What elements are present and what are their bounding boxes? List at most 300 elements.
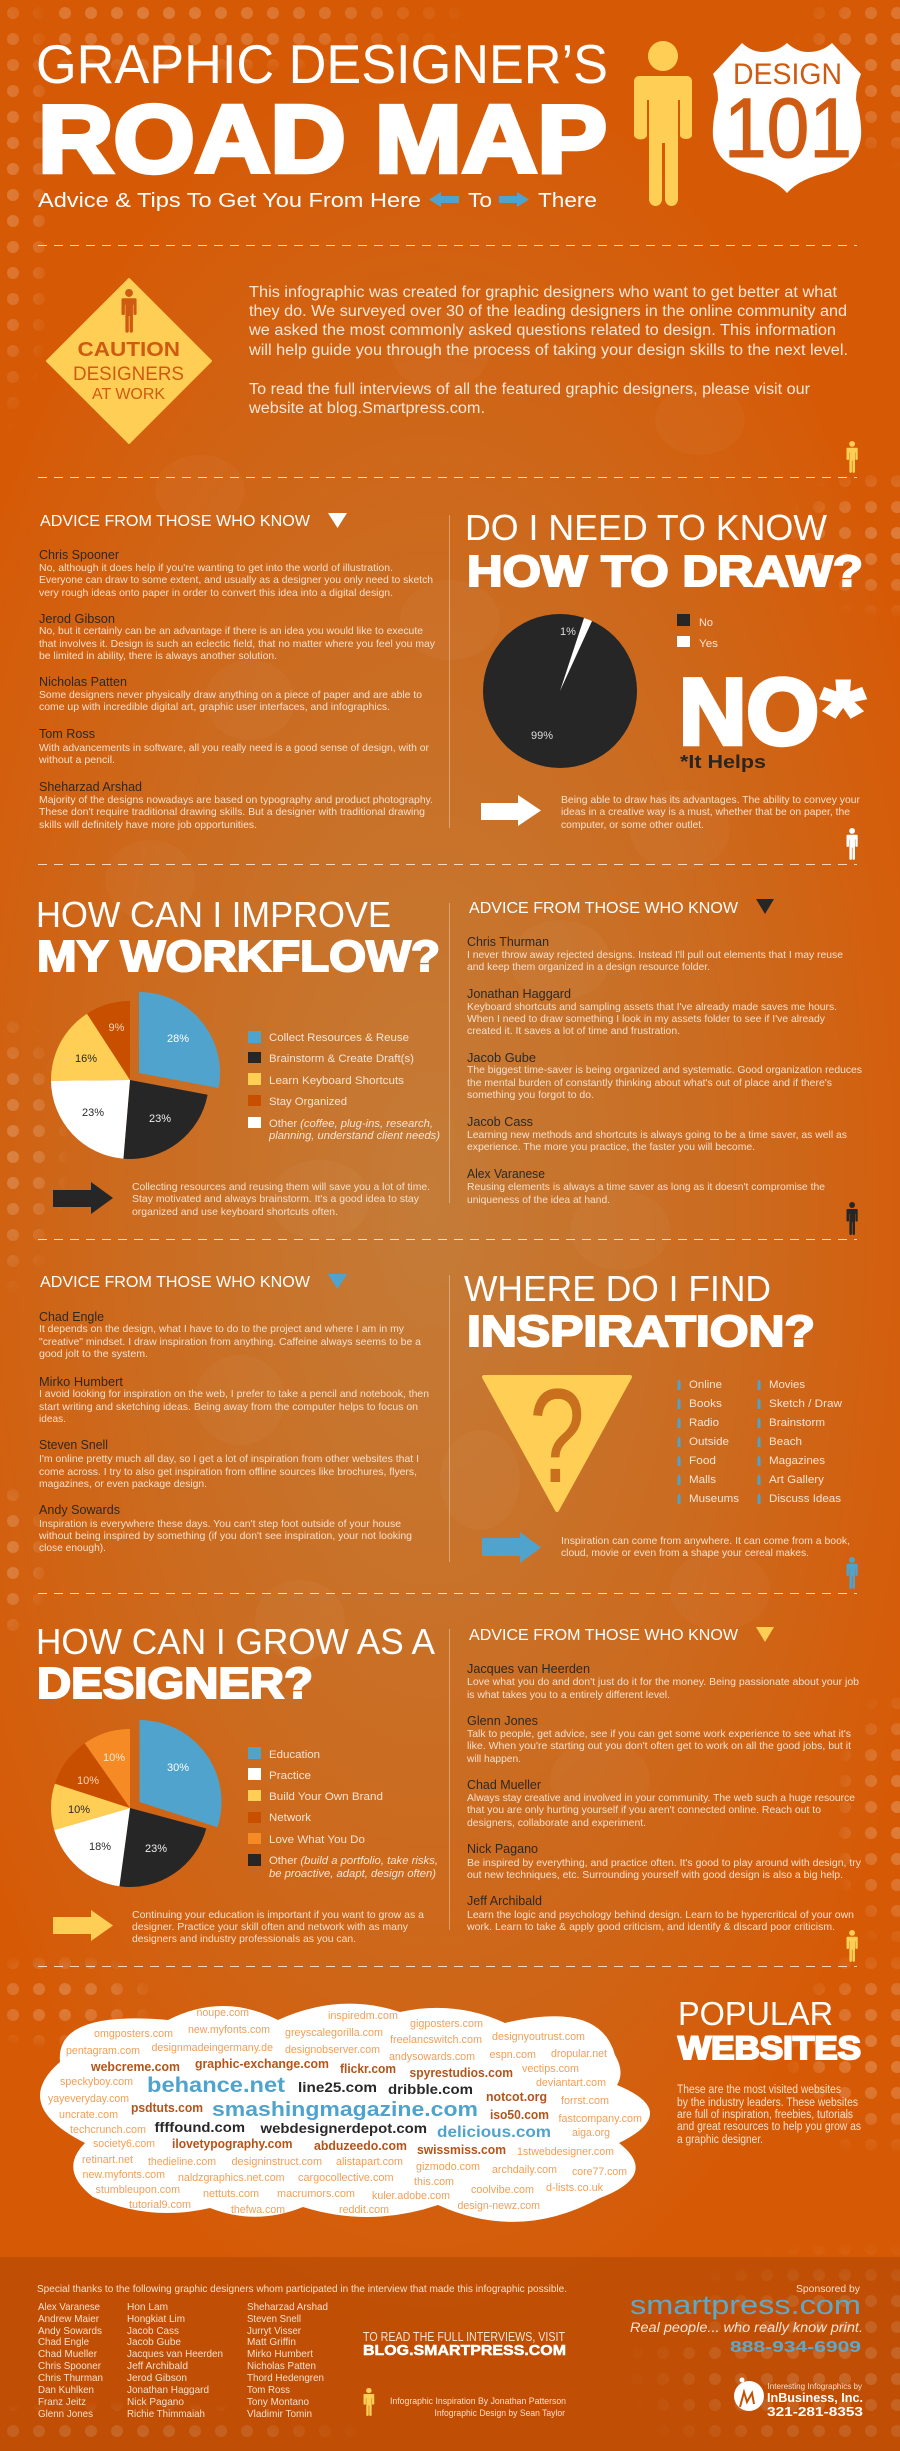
heading: workflow <box>36 894 440 981</box>
word cloud: websites: pentagram.com <box>66 2045 140 2057</box>
word cloud: websites: reddit.com <box>339 2204 389 2216</box>
names column 2: Jacob Cass <box>127 2325 179 2337</box>
icon: design 101 shield: DESIGN <box>733 58 842 91</box>
word cloud: websites: kuler.adobe.com <box>372 2190 450 2202</box>
advice: Steven Snell: I'm online pretty much all day, so I get a lot of inspiration from other websites that I <box>39 1454 419 1465</box>
advice: Steven Snell: come across. I try to also get inspiration from offline sources like brochures, flyers, <box>39 1467 417 1478</box>
word cloud: websites: new.myfonts.com <box>82 2169 165 2181</box>
footer: sponsor smartpress: Sponsored by <box>796 2283 861 2295</box>
footer: special thanks: Special thanks to the following graphic designers whom participated in the interview that made this infographic possible. <box>37 2283 567 2295</box>
advice: Jonathan Haggard: Jonathan Haggard <box>467 987 571 1001</box>
arrow and takeaway: grow <box>53 1910 424 1945</box>
advice: Tom Ross: Tom Ross <box>39 727 95 741</box>
heading: how to draw: DO I NEED TO KNOW <box>465 507 827 548</box>
legend: grow: Love What You Do <box>269 1834 365 1846</box>
pie chart: workflow <box>51 992 220 1159</box>
word cloud: websites: thedieline.com <box>148 2156 216 2168</box>
advice: Chris Spooner <box>39 548 433 599</box>
word cloud: websites: designmadeingermany.de <box>152 2042 273 2054</box>
intro text: To read the full interviews of all the featured graphic designers, please visit our <box>249 381 810 398</box>
list: inspiration sources: Magazines <box>769 1455 826 1467</box>
advice: Tom Ross <box>38 727 430 766</box>
footer: inbusiness logo <box>734 2378 863 2419</box>
advice: Nick Pagano: out new techniques, etc. Surrounding yourself with good design is also a big help. <box>467 1870 843 1881</box>
arrow and takeaway: inspiration: Inspiration can come from anywhere. It can come from a book, <box>561 1536 850 1547</box>
arrow and takeaway: workflow: organized and use keyboard shortcuts often. <box>132 1207 338 1218</box>
list: inspiration sources: Radio <box>689 1417 719 1429</box>
word cloud: websites: spyrestudios.com <box>410 2065 513 2080</box>
advice: Jonathan Haggard: created it. It saves a lot of time and frustration. <box>467 1026 680 1037</box>
pie chart: grow: 23% <box>145 1843 167 1855</box>
caution sign: AT WORK <box>92 386 165 403</box>
advice: Chris Thurman: Chris Thurman <box>467 935 549 949</box>
advice: Jacob Cass: experience. The more you practice, the faster you will become. <box>467 1142 755 1153</box>
subtitle with arrows: There <box>538 190 597 212</box>
list: inspiration sources: Brainstorm <box>769 1417 825 1429</box>
word cloud: websites: d-lists.co.uk <box>546 2182 603 2194</box>
arrow and takeaway: draw: Being able to draw has its advantages. The ability to convey your <box>561 795 861 806</box>
advice: Jacques van Heerden <box>467 1662 859 1701</box>
advice: Jacques van Heerden: Love what you do and don't just do it for the money. Being passionate about your job <box>467 1677 859 1688</box>
heading: workflow: MY WORKFLOW? <box>37 932 440 981</box>
word cloud: websites: retinart.net <box>82 2154 133 2166</box>
list: inspiration sources: Discuss Ideas <box>769 1493 842 1505</box>
word cloud: websites: design-newz.com <box>458 2200 540 2212</box>
pie chart: workflow: 23% <box>82 1107 104 1119</box>
word cloud: websites: speckyboy.com <box>60 2076 133 2088</box>
advice: Andy Sowards <box>38 1503 412 1554</box>
word cloud: websites: designinstruct.com <box>232 2156 322 2168</box>
subtitle with arrows <box>38 190 597 212</box>
names column 3: Tony Montano <box>247 2396 309 2408</box>
advice: Chad Engle: Chad Engle <box>39 1310 104 1324</box>
advice: Glenn Jones: Glenn Jones <box>467 1714 538 1728</box>
advice: Chris Spooner: very rough ideas onto paper in order to convert this idea into a digital design. <box>39 588 393 599</box>
word cloud: websites: webcreme.com <box>90 2059 180 2074</box>
arrow and takeaway: draw: computer, or some other outlet. <box>561 820 704 831</box>
names column 1: Chris Spooner <box>38 2360 101 2372</box>
title <box>36 33 608 193</box>
footer: credits with person icon: Infographic Design by Sean Taylor <box>434 2408 565 2419</box>
advice: Andy Sowards: Andy Sowards <box>39 1503 120 1517</box>
list: inspiration sources: Beach <box>769 1436 802 1448</box>
icon: question triangle: ? <box>529 1362 585 1511</box>
word cloud: websites: coolvibe.com <box>471 2184 534 2196</box>
pie chart: draw <box>483 614 637 768</box>
word cloud: websites: iso50.com <box>490 2107 549 2122</box>
icon: large person <box>634 41 692 206</box>
subtitle with arrows: To <box>468 190 492 212</box>
legend: grow: be proactive, adapt, design often) <box>269 1868 436 1880</box>
panel: popular websites: by the industry leaders. These websites <box>677 2097 858 2109</box>
big answer: no: *It Helps <box>680 752 766 772</box>
big answer: no: * <box>821 661 866 768</box>
heading: inspiration: INSPIRATION? <box>467 1307 815 1356</box>
names column 2: Jerod Gibson <box>127 2372 187 2384</box>
panel: advice on inspiration <box>38 1274 429 1554</box>
pie chart: workflow: 28% <box>167 1033 189 1045</box>
small person yellow <box>846 441 858 473</box>
legend: workflow: Brainstorm & Create Draft(s) <box>269 1053 414 1065</box>
title: ROAD MAP <box>38 86 607 193</box>
advice: Chris Thurman: and keep them organized in a design resource folder. <box>467 962 710 973</box>
legend: workflow: Collect Resources & Reuse <box>269 1032 409 1044</box>
word cloud: websites: yayeveryday.com <box>48 2093 129 2105</box>
panel: advice on workflow <box>467 899 862 1206</box>
advice: Jacob Cass: Jacob Cass <box>467 1115 533 1129</box>
advice: Chad Mueller: that you are only hurting yourself if you aren't connected online. Reach out to <box>467 1805 821 1816</box>
advice: Jeff Archibald: Jeff Archibald <box>467 1894 542 1908</box>
arrow and takeaway: inspiration <box>482 1532 850 1563</box>
advice: Nicholas Patten: Nicholas Patten <box>39 675 127 689</box>
names column 1: Glenn Jones <box>38 2408 93 2420</box>
names column 1: Andy Sowards <box>38 2325 102 2337</box>
word cloud: websites: designobserver.com <box>285 2044 380 2056</box>
panel: popular websites: POPULAR <box>678 1995 833 2032</box>
heading: grow: HOW CAN I GROW AS A <box>36 1621 435 1662</box>
advice: Glenn Jones: will happen. <box>466 1754 521 1765</box>
legend: grow: Other (build a portfolio, take risks, <box>269 1855 438 1867</box>
advice: Chris Spooner: Everyone can draw to some extent, and usually as a designer you only need to sketch <box>39 575 433 586</box>
advice: Jonathan Haggard: Keyboard shortcuts and sampling assets that I've already made saves me hours. <box>467 1002 837 1013</box>
intro text: website at blog.Smartpress.com. <box>248 400 485 417</box>
pie chart: grow: 30% <box>167 1762 189 1774</box>
advice: Sheharzad Arshad <box>39 780 433 831</box>
names column 2: Hongkiat Lim <box>127 2313 185 2325</box>
word cloud: websites: omgposters.com <box>94 2028 173 2040</box>
word cloud: websites: core77.com <box>572 2166 627 2178</box>
names column 3: Steven Snell <box>247 2313 301 2325</box>
advice: Andy Sowards: Inspiration is everywhere these days. You can't step foot outside of your house <box>39 1519 401 1530</box>
caution sign <box>47 279 211 443</box>
list: inspiration sources: Online <box>689 1379 722 1391</box>
advice: Jacob Gube: Jacob Gube <box>467 1051 536 1065</box>
pie chart: draw: 99% <box>531 730 553 742</box>
word cloud: websites: this.com <box>414 2176 454 2188</box>
word cloud: websites <box>40 2004 650 2222</box>
legend: grow: Practice <box>269 1770 311 1782</box>
word cloud: websites: gigposters.com <box>410 2018 483 2030</box>
footer: sponsor smartpress: 888-934-6909 <box>730 2339 862 2356</box>
advice: Andy Sowards: close enough). <box>39 1543 106 1554</box>
names column 3: Vladimir Tomin <box>247 2408 312 2420</box>
names column 2: Jonathan Haggard <box>127 2384 209 2396</box>
pie chart: grow: 10% <box>68 1804 90 1816</box>
footer: sponsor smartpress <box>630 2283 863 2356</box>
footer: sponsor smartpress: Real people... who really know print. <box>630 2320 863 2335</box>
advice: Mirko Humbert <box>39 1375 429 1425</box>
advice: Steven Snell: magazines, or even package design. <box>39 1479 207 1490</box>
word cloud: websites: delicious.com <box>437 2124 551 2141</box>
legend: workflow <box>248 1031 440 1142</box>
pie chart: draw: 1% <box>560 626 576 638</box>
names column 1: Chris Thurman <box>38 2372 103 2384</box>
advice: Alex Varanese <box>467 1167 825 1206</box>
arrow and takeaway: draw: ideas in a creative way is a must, whether that be on paper, the <box>561 807 850 818</box>
word cloud: websites: graphic-exchange.com <box>195 2056 329 2071</box>
word cloud: websites: espn.com <box>490 2049 536 2061</box>
pie chart: workflow: 23% <box>149 1113 171 1125</box>
footer: read more link: TO READ THE FULL INTERVIEWS, VISIT <box>363 2329 565 2344</box>
word cloud: websites: forrst.com <box>561 2095 609 2107</box>
small person dark <box>846 1202 858 1235</box>
advice: Chad Mueller: designers, collaborate and experiment. <box>467 1818 646 1829</box>
subtitle with arrows: Advice & Tips To Get You From Here <box>38 190 421 212</box>
legend: draw: Yes <box>699 638 719 650</box>
legend: workflow: planning, understand client needs) <box>268 1130 440 1142</box>
icon: design 101 shield: 101 <box>724 81 852 175</box>
advice: Tom Ross: without a pencil. <box>38 755 115 766</box>
footer: sponsor smartpress: smartpress.com <box>630 2290 861 2320</box>
advice: Nicholas Patten: Some designers never physically draw anything on a piece of paper and are able to <box>39 690 422 701</box>
advice: Chris Spooner: No, although it does help if you're wanting to get into the world of illustration. <box>39 563 393 574</box>
word cloud: websites: thefwa.com <box>231 2204 285 2216</box>
names column 1: Chad Engle <box>38 2336 89 2348</box>
advice: Chad Mueller: Always stay creative and involved in your community. The web such a huge resource <box>467 1793 855 1804</box>
title: GRAPHIC DESIGNER’S <box>36 33 608 95</box>
advice: Jeff Archibald <box>466 1894 854 1933</box>
advice: Jacques van Heerden: is what takes you to a entirely different level. <box>467 1690 670 1701</box>
advice: Sheharzad Arshad: These don't require traditional drawing skills. But a designer with traditional drawing <box>39 807 425 818</box>
names column 2: Richie Thimmaiah <box>127 2408 205 2420</box>
advice: Alex Varanese: uniqueness of the idea at hand. <box>467 1195 610 1206</box>
advice: Nicholas Patten <box>39 675 422 713</box>
names column 3: Jurryt Visser <box>247 2325 301 2337</box>
arrow and takeaway: workflow <box>53 1182 430 1218</box>
word cloud: websites: stumbleupon.com <box>96 2184 180 2196</box>
advice heading: ADVICE FROM THOSE WHO KNOW <box>469 900 739 917</box>
footer: inbusiness logo: 321-281-8353 <box>767 2404 863 2419</box>
panel: popular websites: These are the most visited websites <box>677 2084 841 2096</box>
list: inspiration sources: Malls <box>689 1474 717 1486</box>
intro text <box>248 284 848 417</box>
word cloud: websites: society6.com <box>93 2138 155 2150</box>
advice heading: ADVICE FROM THOSE WHO KNOW <box>40 513 311 530</box>
advice: Sheharzad Arshad: skills will definitely have more job opportunities. <box>39 820 257 831</box>
heading: inspiration <box>464 1268 815 1356</box>
advice: Jerod Gibson: No, but it certainly can be an advantage if there is an idea you would like to execute <box>39 626 423 637</box>
names column 3: Thord Hedengren <box>247 2372 324 2384</box>
heading: inspiration: WHERE DO I FIND <box>464 1268 771 1309</box>
panel: popular websites: are full of inspiration, freebies, tutorials <box>677 2109 853 2121</box>
word cloud: websites: notcot.org <box>486 2089 547 2104</box>
names column 3: Nicholas Patten <box>247 2360 316 2372</box>
advice: Jerod Gibson: be limited in ability, there is always another solution. <box>39 651 277 662</box>
word cloud: websites: alistapart.com <box>336 2156 403 2168</box>
footer: credits with person icon: Infographic Inspiration By Jonathan Patterson <box>390 2396 566 2407</box>
advice heading: ADVICE FROM THOSE WHO KNOW <box>469 1627 739 1644</box>
advice: Jacob Gube: the mental burden of constantly thinking about what's out of place and if there's <box>467 1078 832 1089</box>
footer: credits with person icon <box>364 2388 566 2419</box>
advice: Glenn Jones <box>466 1714 851 1765</box>
list: inspiration sources: Museums <box>689 1493 740 1505</box>
list: inspiration sources: Sketch / Draw <box>769 1398 842 1410</box>
advice: Chad Mueller <box>467 1778 855 1829</box>
icon: design 101 shield <box>713 43 861 193</box>
advice: Mirko Humbert: start writing and sketching ideas. Being away from the computer helps to focus on <box>39 1402 418 1413</box>
word cloud: websites: andysowards.com <box>389 2051 475 2063</box>
heading: workflow: HOW CAN I IMPROVE <box>36 894 391 935</box>
panel: advice on growing <box>466 1627 862 1933</box>
list: inspiration sources <box>678 1379 842 1505</box>
advice: Nicholas Patten: come up with incredible digital art, graphic user interfaces, and infographics. <box>39 702 390 713</box>
legend: draw <box>677 614 719 650</box>
word cloud: websites: behance.net <box>147 2074 285 2097</box>
word cloud: websites: tutorial9.com <box>129 2199 191 2211</box>
big answer: no: NO <box>679 659 819 764</box>
word cloud: websites: fastcompany.com <box>558 2113 642 2125</box>
list: inspiration sources: Books <box>689 1398 723 1410</box>
advice: Jacques van Heerden: Jacques van Heerden <box>467 1662 590 1676</box>
advice: Mirko Humbert: ideas. <box>39 1414 66 1425</box>
caution sign: DESIGNERS <box>73 364 184 385</box>
advice: Chris Thurman <box>467 935 843 973</box>
word cloud: websites: techcrunch.com <box>70 2124 146 2136</box>
names column 3: Tom Ross <box>247 2384 290 2396</box>
word cloud: websites: designyoutrust.com <box>492 2031 585 2043</box>
small person blue <box>846 1557 858 1589</box>
names column 2: Jacob Gube <box>127 2336 181 2348</box>
names column 2: Nick Pagano <box>127 2396 184 2408</box>
advice: Sheharzad Arshad: Majority of the designs nowadays are based on typography and product photography. <box>39 795 433 806</box>
intro text: they do. We surveyed over 30 of the leading designers in the online community and <box>249 303 847 320</box>
word cloud: websites: ffffound.com <box>154 2119 245 2135</box>
advice: Jerod Gibson: that involves it. Design is such an eclectic field, that no matter where you feel you may <box>39 639 436 650</box>
arrow and takeaway: grow: designers and industry professionals as you can. <box>132 1934 356 1945</box>
advice: Jeff Archibald: work. Learn to take & apply good criticism, and identify & discard poor criticism. <box>466 1922 835 1933</box>
arrow and takeaway: grow: designer. Practice your skill often and network with as many <box>132 1922 409 1933</box>
word cloud: websites: 1stwebdesigner.com <box>517 2146 614 2158</box>
intro text: we asked the most commonly asked questions related to design. This information <box>248 322 836 339</box>
word cloud: websites: greyscalegorilla.com <box>285 2027 383 2039</box>
pie chart: grow: 10% <box>77 1775 99 1787</box>
pie chart: grow <box>51 1720 222 1887</box>
names column 2: Hon Lam <box>127 2301 168 2313</box>
legend: grow: Education <box>269 1749 320 1761</box>
advice: Jacob Gube: something you forgot to do. <box>467 1090 594 1101</box>
advice: Jonathan Haggard: When I need to draw something I look in my assets folder to see if I've already <box>467 1014 826 1025</box>
names column 2: Jeff Archibald <box>127 2360 188 2372</box>
heading: how to draw: HOW TO DRAW? <box>467 547 863 596</box>
arrow and takeaway: draw <box>481 795 861 831</box>
word cloud: websites: gizmodo.com <box>416 2161 480 2173</box>
advice: Chad Mueller: Chad Mueller <box>467 1778 541 1792</box>
word cloud: websites: uncrate.com <box>59 2109 118 2121</box>
icon: question triangle <box>484 1362 630 1511</box>
advice: Chad Engle: It depends on the design, what I have to do to the project and where I am in my <box>39 1324 405 1335</box>
word cloud: websites: psdtuts.com <box>131 2100 203 2115</box>
advice: Steven Snell <box>39 1438 419 1490</box>
names column 1: Chad Mueller <box>38 2348 97 2360</box>
word cloud: websites: abduzeedo.com <box>314 2138 407 2153</box>
legend: workflow: Learn Keyboard Shortcuts <box>269 1075 405 1087</box>
names column 1: Dan Kuhlken <box>38 2384 94 2396</box>
advice: Chad Engle: "creative" mindset. I draw inspiration from anything. Caffeine always seems to be a <box>39 1337 421 1348</box>
word cloud: websites: dropular.net <box>551 2048 607 2060</box>
names column 3: Sheharzad Arshad <box>247 2301 328 2313</box>
legend: workflow: Stay Organized <box>269 1096 347 1108</box>
list: inspiration sources: Outside <box>689 1436 729 1448</box>
footer: read more link: BLOG.SMARTPRESS.COM <box>363 2343 566 2359</box>
intro text: This infographic was created for graphic designers who want to get better at what <box>249 284 838 301</box>
pie chart: workflow: 16% <box>75 1053 97 1065</box>
word cloud: websites: deviantart.com <box>536 2077 606 2089</box>
advice: Jacob Cass: Learning new methods and shortcuts is always going to be a time saver, as well as <box>467 1130 847 1141</box>
advice: Jonathan Haggard <box>467 987 837 1037</box>
word cloud: websites: flickr.com <box>340 2061 396 2076</box>
word cloud: websites: ilovetypography.com <box>172 2136 292 2151</box>
advice: Jerod Gibson: Jerod Gibson <box>39 612 115 626</box>
panel: popular websites <box>677 1995 861 2146</box>
arrow and takeaway: inspiration: cloud, movie or even from a shape your cereal makes. <box>561 1548 809 1559</box>
word cloud: websites: nettuts.com <box>203 2188 259 2200</box>
panel: popular websites: WEBSITES <box>678 2030 861 2066</box>
legend: grow <box>248 1747 438 1880</box>
names column 3: Matt Griffin <box>247 2336 296 2348</box>
panel: popular websites: a graphic designer. <box>677 2134 763 2146</box>
word cloud: websites: swissmiss.com <box>417 2142 506 2157</box>
legend: grow: Build Your Own Brand <box>269 1791 383 1803</box>
advice heading: ADVICE FROM THOSE WHO KNOW <box>40 1274 311 1291</box>
names column 1: Alex Varanese <box>38 2301 100 2313</box>
heading: how to draw <box>465 507 863 596</box>
word cloud: websites: vectips.com <box>522 2063 579 2075</box>
panel: advice on drawing <box>38 513 436 831</box>
advice: Jacob Gube: The biggest time-saver is being organized and systematic. Good organization reduces <box>467 1065 862 1076</box>
arrow and takeaway: workflow: Stay motivated and always brainstorm. It's a good idea to stay <box>132 1194 420 1205</box>
word cloud: websites: naldzgraphics.net.com <box>178 2172 284 2184</box>
advice: Mirko Humbert: I avoid looking for inspiration on the web, I prefer to take a pencil and notebook, then <box>39 1389 429 1400</box>
arrow and takeaway: grow: Continuing your education is important if you want to grow as a <box>132 1910 424 1921</box>
small person white <box>846 828 858 860</box>
footer: special thanks <box>37 2283 567 2420</box>
word cloud: websites: aiga.org <box>572 2127 610 2139</box>
advice: Jacob Gube <box>467 1051 862 1101</box>
word cloud: websites: smashingmagazine.com <box>212 2099 478 2121</box>
advice: Jeff Archibald: Learn the logic and psychology behind design. Learn to be hypercritical of your own <box>467 1910 854 1921</box>
advice: Chad Engle <box>39 1310 421 1360</box>
footer: inbusiness logo: InBusiness, Inc. <box>767 2390 863 2405</box>
names column 3: Mirko Humbert <box>247 2348 313 2360</box>
word cloud: websites: dribble.com <box>388 2081 473 2097</box>
word cloud: websites: line25.com <box>298 2079 377 2095</box>
word cloud: websites: archdaily.com <box>492 2164 557 2176</box>
advice: Glenn Jones: like. When you're starting out you don't often get to work on all the good jobs, but it <box>467 1741 851 1752</box>
advice: Nick Pagano: Be inspired by everything, and practice often. It's good to play around with design, try <box>467 1858 862 1869</box>
legend: draw: No <box>699 617 713 629</box>
panel: popular websites: and great resources to help you grow as <box>677 2121 861 2133</box>
word cloud: websites: inspiredm.com <box>328 2010 398 2022</box>
advice: Alex Varanese: Alex Varanese <box>467 1167 545 1181</box>
advice: Glenn Jones: Talk to people, get advice, see if you can get some work experience to see what it's <box>467 1729 851 1740</box>
word cloud: websites: new.myfonts.com <box>188 2024 270 2036</box>
word cloud: websites: webdesignerdepot.com <box>259 2120 427 2136</box>
advice: Alex Varanese: Reusing elements is always a time saver as long as it doesn't compromise the <box>467 1182 825 1193</box>
word cloud: websites: freelancswitch.com <box>390 2034 482 2046</box>
advice: Jacob Cass <box>467 1115 847 1153</box>
names column 3 <box>247 2301 328 2420</box>
advice: Nick Pagano: Nick Pagano <box>467 1842 538 1856</box>
legend: grow: Network <box>269 1812 312 1824</box>
names column 1 <box>38 2301 103 2420</box>
advice: Steven Snell: Steven Snell <box>39 1438 108 1452</box>
list: inspiration sources: Art Gallery <box>769 1474 825 1486</box>
names column 2 <box>127 2301 223 2420</box>
advice: Chris Spooner: Chris Spooner <box>39 548 119 562</box>
names column 1: Franz Jeitz <box>38 2396 86 2408</box>
heading: grow <box>36 1621 435 1708</box>
advice: Sheharzad Arshad: Sheharzad Arshad <box>39 780 142 794</box>
